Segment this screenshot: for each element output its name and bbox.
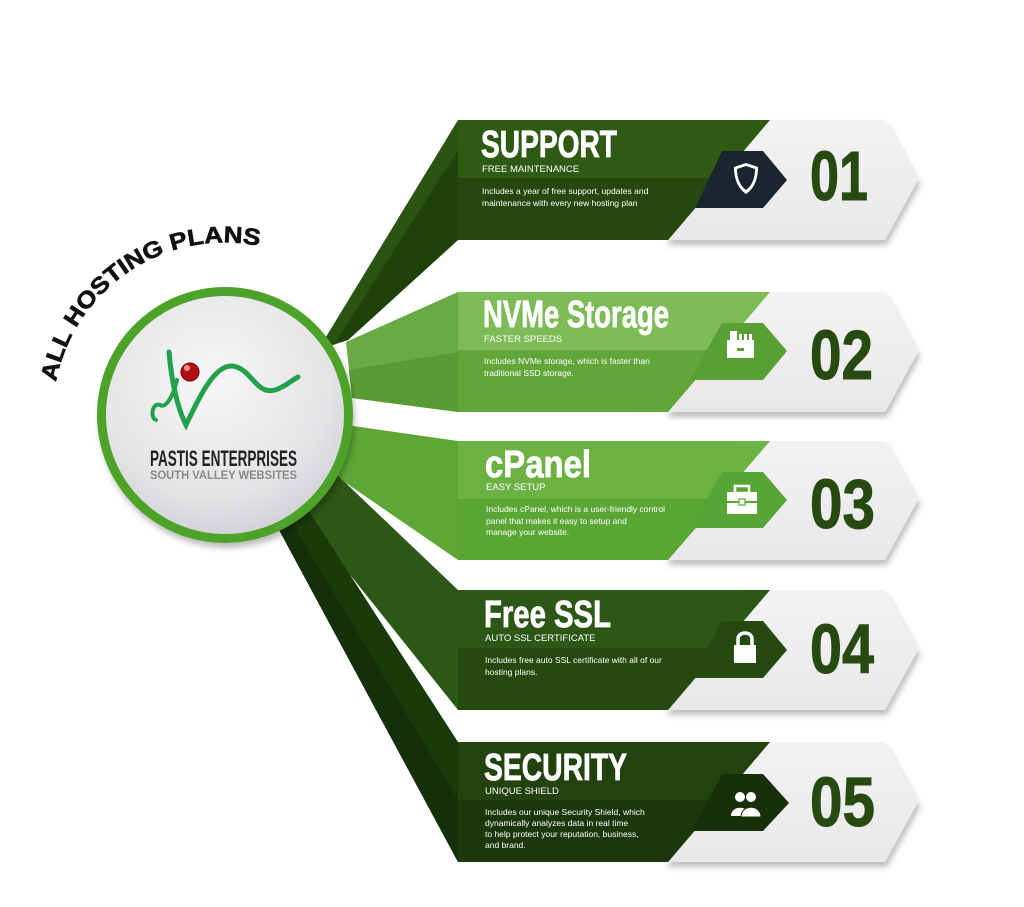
panel 4: free SSL: Free SSL (484, 594, 611, 636)
panel 3: cPanel: EASY SETUP (486, 482, 546, 493)
panel 5: security: and brand. (485, 840, 526, 850)
panel 5: security: SECURITY (484, 747, 627, 789)
panel 2: NVMe storage: traditional SSD storage. (484, 368, 574, 378)
logo circle (97, 287, 353, 543)
icon: shield (695, 151, 787, 208)
logo mark (153, 352, 298, 425)
panel 1: support: FREE MAINTENANCE (482, 164, 579, 175)
icon: padlock (690, 621, 787, 678)
panel 5: security (458, 742, 918, 862)
panel 4: free SSL: Includes free auto SSL certificate with all of our (485, 655, 662, 665)
panel 1: support: maintenance with every new hosting plan (482, 198, 638, 208)
panel 1: support (458, 120, 918, 240)
panel 5: security: Includes our unique Security Shield, which (485, 807, 645, 817)
panel 2: NVMe storage: FASTER SPEEDS (484, 334, 562, 345)
icon: users (692, 774, 789, 831)
panel 4: free SSL: hosting plans. (485, 667, 537, 677)
panel 1: support: 01 (810, 137, 868, 215)
panel 5: security: UNIQUE SHIELD (485, 786, 559, 797)
panel 5: security: dynamically analyzes data in real time (485, 818, 628, 828)
panel 4: free SSL: AUTO SSL CERTIFICATE (485, 633, 596, 644)
panel 3: cPanel: cPanel (485, 444, 591, 486)
panel 2: NVMe storage: Includes NVMe storage, which is faster than (484, 356, 650, 366)
icon: storage box (690, 323, 787, 380)
panel 1: support: Includes a year of free support, updates and (482, 186, 649, 196)
panel 4: free SSL: 04 (810, 610, 874, 688)
panel 2: NVMe storage: 02 (810, 316, 873, 394)
panel 2: NVMe storage (458, 292, 918, 412)
panel 5: security: 05 (810, 763, 875, 841)
panel 3: cPanel: 03 (810, 465, 875, 543)
logo text: PASTIS ENTERPRISES (150, 446, 297, 471)
title: ALL HOSTING PLANS: ALL HOSTING PLANS (42, 226, 260, 382)
logo circle: SOUTH VALLEY WEBSITES (150, 468, 297, 482)
panel 4: free SSL (458, 590, 918, 710)
panel 2: NVMe storage: NVMe Storage (483, 294, 669, 336)
panel 3: cPanel: manage your website. (486, 527, 569, 537)
panel 3: cPanel (458, 441, 918, 560)
panel 3: cPanel: panel that makes it easy to setup and (486, 516, 627, 526)
panel 5: security: to help protect your reputation, business, (485, 829, 639, 839)
panel 1: support: SUPPORT (481, 124, 617, 166)
icon: toolbox (690, 472, 787, 528)
fan connectors (278, 120, 458, 862)
panel 3: cPanel: Includes cPanel, which is a user-friendly control (486, 504, 665, 514)
